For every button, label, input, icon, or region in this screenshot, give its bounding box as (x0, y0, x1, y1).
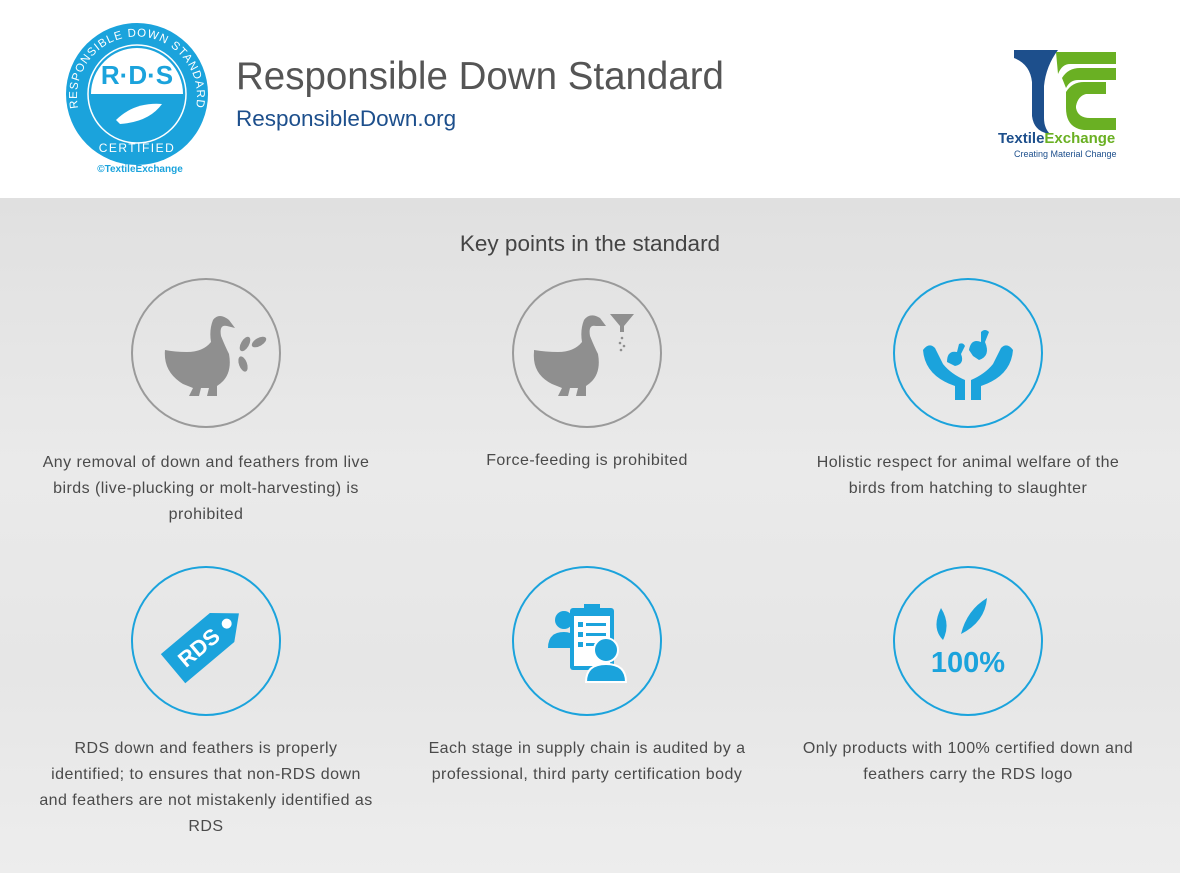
icon: feathers 100%: 100% (931, 647, 1005, 679)
panel: animal welfare (817, 278, 1119, 497)
panel: audit (429, 566, 745, 783)
panel: live plucking (42, 278, 369, 523)
logo: Textile Exchange (998, 50, 1117, 159)
logo: RDS: RESPONSIBLE DOWN STANDARD (69, 28, 205, 108)
panel: force feeding (486, 278, 688, 469)
text: Holistic respect for animal welfare of the birds from hatching to slaughter (817, 454, 1119, 497)
panel: identification (39, 566, 373, 835)
logo: Textile Exchange: Creating Material Change (1014, 149, 1117, 159)
text: Only products with 100% certified down and feathers carry the RDS logo (803, 740, 1133, 783)
panel: 100% (803, 566, 1133, 783)
text: Any removal of down and feathers from live birds (live-plucking or molt-harvesting) is prohibited (43, 454, 369, 523)
logo: RDS: CERTIFIED (99, 141, 175, 155)
icon: hands birds (893, 278, 1043, 428)
icon: feathers 100% (893, 566, 1043, 716)
icon: RDS tag: RDS (173, 623, 225, 672)
background (0, 198, 1180, 873)
header (0, 0, 1180, 198)
logo: RDS: R·D·S (101, 60, 173, 90)
logo: RDS (66, 23, 208, 175)
text: RDS down and feathers is properly identified; to ensures that non-RDS down and feathers are not mistakenly identified as RDS (39, 740, 373, 835)
title: Responsible Down Standard (236, 55, 724, 98)
text: Each stage in supply chain is audited by a professional, third party certification body (429, 740, 745, 783)
logo: Textile Exchange: TextileExchange (998, 130, 1115, 147)
logo: RDS: ©TextileExchange (97, 164, 183, 175)
icon: duck feathers (131, 278, 281, 428)
icon: RDS tag (131, 566, 281, 716)
icon: auditor clipboard (512, 566, 662, 716)
url: ResponsibleDown.org (236, 106, 456, 131)
heading: Key points in the standard (460, 231, 720, 256)
text: Force-feeding is prohibited (486, 452, 688, 469)
icon: duck funnel (512, 278, 662, 428)
